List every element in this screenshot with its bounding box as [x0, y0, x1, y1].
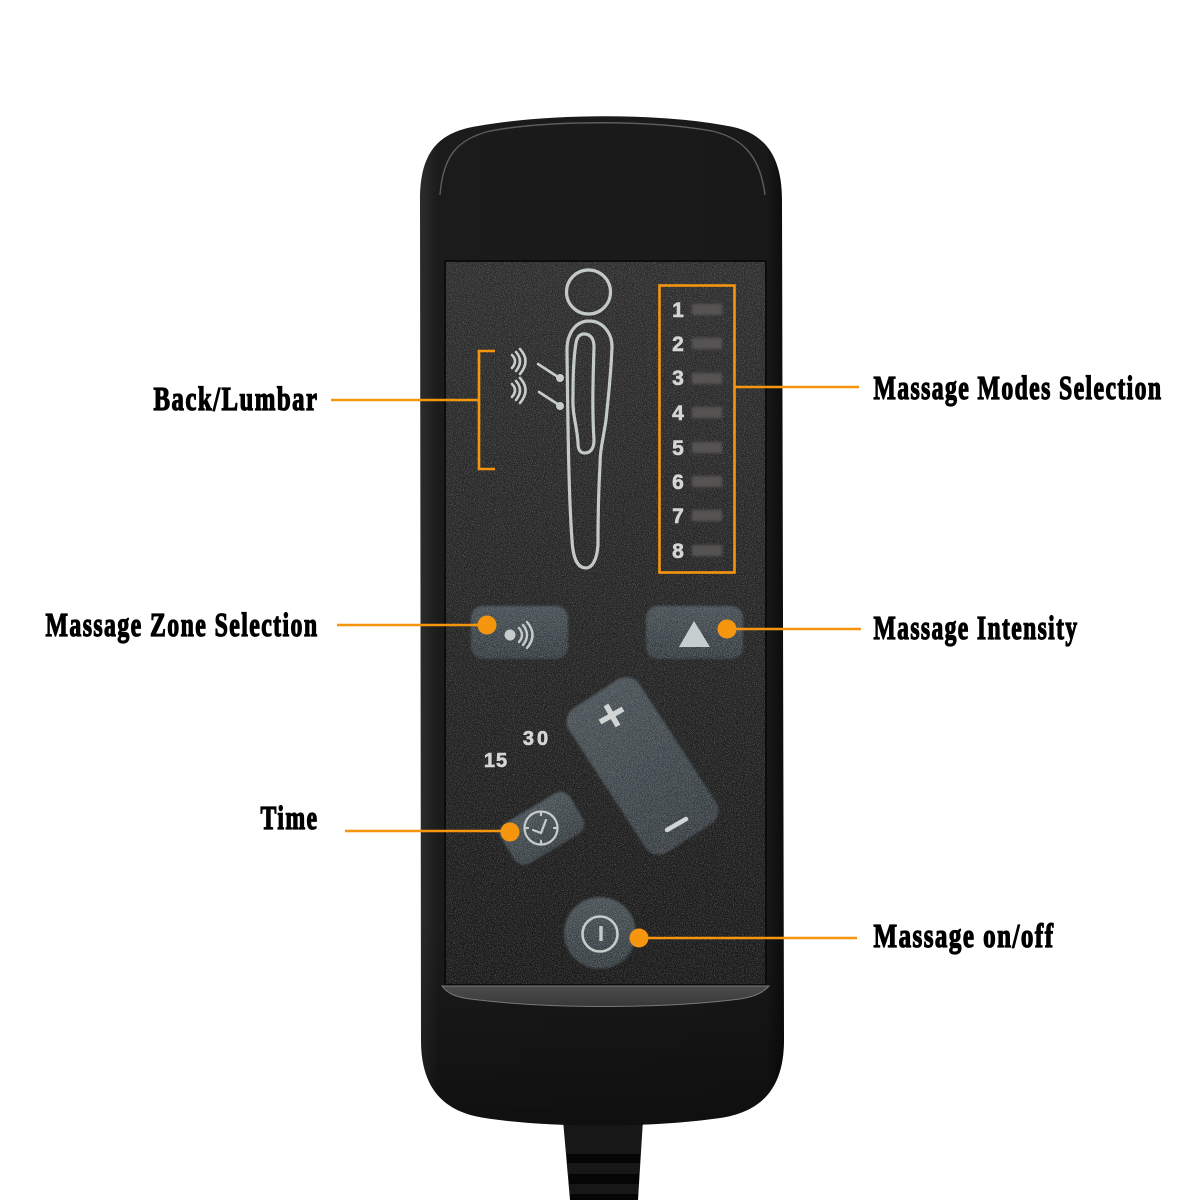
mode numbers and indicators: 8 [672, 540, 684, 563]
mode numbers and indicators: 5 [672, 437, 684, 460]
callout: time [260, 800, 520, 842]
callout: time: Time [260, 800, 318, 837]
icon: massage waves and sensor lines [512, 349, 564, 410]
timer labels: 15 [484, 750, 508, 772]
cable [563, 1120, 643, 1200]
button: massage zone selection [471, 606, 568, 659]
mode numbers and indicators: 3 [672, 367, 684, 390]
timer labels [484, 728, 551, 772]
mode numbers and indicators: 6 [672, 471, 684, 494]
top cap highlight [440, 123, 765, 195]
button: plus minus rocker [560, 671, 725, 861]
timer labels: 30 [523, 728, 551, 750]
callout: back/lumbar [154, 351, 495, 469]
callout: massage modes selection [660, 286, 1162, 572]
callout: massage on/off [630, 918, 1054, 955]
mode numbers and indicators: 4 [672, 402, 684, 425]
remote control body [420, 116, 784, 1126]
body figure icon [566, 270, 612, 568]
callout: massage intensity: Massage Intensity [874, 610, 1078, 647]
mode numbers and indicators [672, 299, 722, 563]
callout: massage intensity [718, 610, 1078, 647]
button: power [564, 897, 636, 969]
control panel [444, 260, 767, 986]
button: time [496, 788, 589, 869]
mode numbers and indicators: 2 [672, 333, 684, 356]
mode numbers and indicators: 1 [672, 299, 684, 322]
mode numbers and indicators: 7 [672, 505, 684, 528]
callout: massage on/off: Massage on/off [874, 918, 1054, 955]
lower lip [442, 986, 769, 1006]
callout: massage zone selection: Massage Zone Selection [46, 607, 318, 644]
button: massage intensity [646, 606, 743, 659]
callout: back/lumbar: Back/Lumbar [154, 381, 318, 418]
